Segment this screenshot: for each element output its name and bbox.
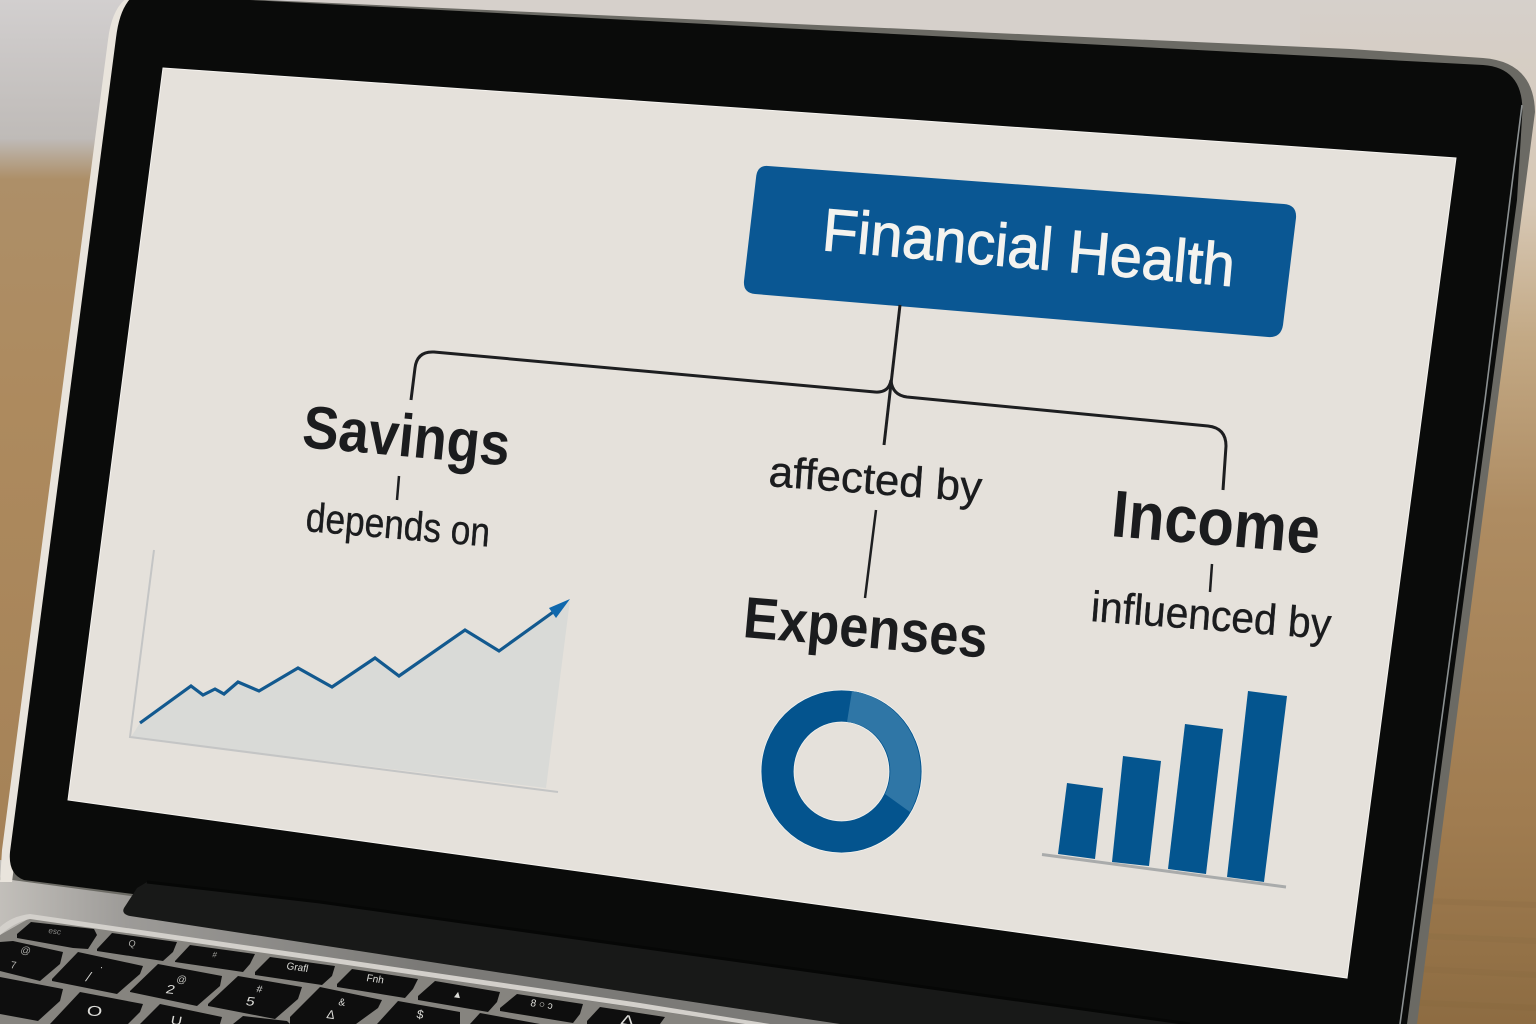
key legends: .	[99, 960, 104, 971]
connector: affected by to Expenses	[865, 510, 876, 598]
key legends: Grafl	[285, 961, 309, 975]
laptop left highlight edge	[0, 0, 136, 882]
key legends: ▲	[451, 989, 463, 1001]
bezel inner glint	[1400, 105, 1522, 1024]
chart axes	[130, 550, 558, 792]
chart arrowhead	[549, 599, 570, 618]
bar 4	[1227, 691, 1287, 882]
heading: Savings: Savings	[300, 392, 513, 479]
label: affected by: affected by	[767, 448, 984, 512]
key legends	[9, 926, 636, 1024]
bar chart	[1042, 691, 1287, 887]
laptop hinge	[123, 882, 1190, 1024]
key legends: @	[175, 974, 188, 986]
bar 1	[1058, 783, 1103, 859]
chart area fill	[131, 600, 570, 788]
key legends: 8 ○ ɔ	[529, 998, 554, 1012]
heading: Income: Income	[1109, 477, 1323, 569]
key legends: O	[85, 1002, 104, 1020]
bar 2	[1112, 756, 1161, 866]
chart trend line	[140, 610, 556, 723]
key legends: @	[19, 945, 32, 957]
label: depends on: depends on	[304, 494, 492, 556]
donut chart	[761, 690, 922, 853]
keys	[0, 922, 665, 1024]
bar 3	[1168, 724, 1223, 874]
key legends: #	[255, 984, 263, 996]
line chart: savings growth	[130, 550, 570, 792]
connector: Income to influenced by	[1210, 564, 1212, 592]
bar chart baseline	[1042, 854, 1286, 887]
keyboard deck	[0, 860, 1000, 1024]
key legends: $	[415, 1007, 425, 1022]
connector tree	[411, 305, 1226, 490]
keyboard	[0, 914, 770, 1024]
key legends: 5	[244, 995, 257, 1009]
key legends: 7	[9, 960, 17, 972]
key legends: Fnh	[365, 973, 385, 986]
donut highlighted segment	[847, 691, 921, 812]
key legends: Q	[128, 938, 137, 949]
key legends: #	[212, 950, 218, 960]
label: influenced by: influenced by	[1089, 583, 1333, 649]
key legends: &	[337, 997, 346, 1009]
key legends: esc	[48, 926, 62, 937]
key legends: /	[84, 970, 93, 984]
key legends: 2	[164, 983, 177, 997]
keyboard well	[0, 918, 745, 1024]
title box: Financial Health: Financial Health	[820, 195, 1238, 299]
key legends: Δ	[325, 1007, 336, 1022]
connector: Savings to depends on	[397, 476, 399, 500]
deck bright edge	[0, 914, 770, 1024]
title box: Financial Health	[744, 166, 1296, 337]
heading: Expenses: Expenses	[741, 585, 991, 671]
hinge seam	[147, 882, 1190, 1024]
